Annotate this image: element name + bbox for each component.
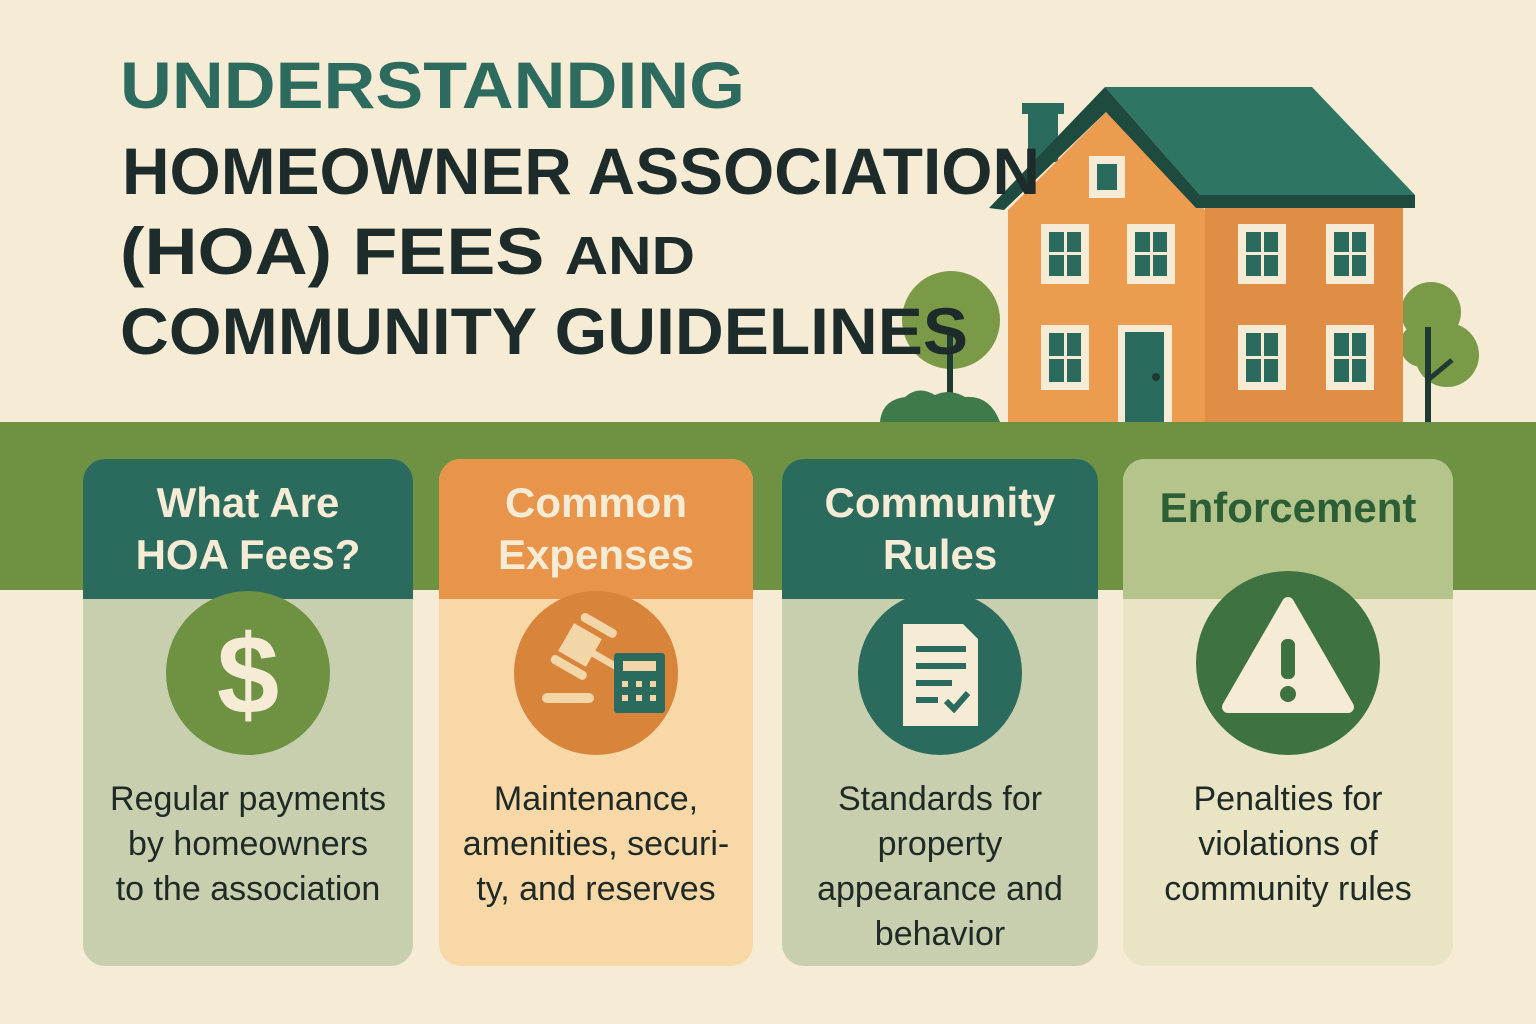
text: behavior xyxy=(875,915,1005,953)
header: Community xyxy=(824,479,1056,526)
card: Community Rules xyxy=(782,459,1098,966)
card: What Are HOA Fees xyxy=(83,459,413,966)
title xyxy=(120,48,1040,368)
header xyxy=(83,459,413,599)
text xyxy=(463,780,729,908)
text: to the association xyxy=(116,870,380,908)
house xyxy=(989,87,1415,422)
text: ty, and reserves xyxy=(476,870,716,908)
header: Common xyxy=(505,479,687,526)
green band xyxy=(0,422,1536,590)
icon: dollar xyxy=(166,591,330,755)
text: appearance and xyxy=(817,870,1063,908)
header xyxy=(1123,459,1453,599)
icon: gavel and calculator xyxy=(514,591,678,755)
tree left xyxy=(880,271,1000,422)
icon: dollar: $ xyxy=(217,612,279,737)
header: HOA Fees? xyxy=(136,531,360,578)
text: Standards for xyxy=(838,780,1042,818)
text xyxy=(110,780,386,908)
header: Rules xyxy=(883,531,997,578)
illustration: house and trees xyxy=(880,87,1479,422)
text: amenities, securi- xyxy=(463,825,729,863)
tree right xyxy=(1400,282,1479,422)
icon: warning xyxy=(1196,571,1380,755)
text: community rules xyxy=(1164,870,1412,908)
header: Enforcement xyxy=(1160,484,1416,531)
text xyxy=(817,780,1063,953)
icon: document xyxy=(858,599,1022,755)
title: (HOA) FEES AND xyxy=(120,214,695,288)
header: Expenses xyxy=(498,531,694,578)
header: What Are xyxy=(157,479,339,526)
title: HOMEOWNER ASSOCIATION xyxy=(122,134,1040,208)
card: Common Expenses xyxy=(439,459,753,966)
text: by homeowners xyxy=(128,825,368,863)
card: Enforcement xyxy=(1123,459,1453,966)
header xyxy=(439,459,753,599)
text: property xyxy=(878,825,1002,863)
text: Penalties for xyxy=(1194,780,1382,818)
text xyxy=(1164,780,1412,908)
text: violations of xyxy=(1198,825,1378,863)
text: Maintenance, xyxy=(494,780,698,818)
header xyxy=(782,459,1098,599)
text: Regular payments xyxy=(110,780,386,818)
title: UNDERSTANDING xyxy=(120,48,745,122)
title: COMMUNITY GUIDELINES xyxy=(120,294,968,368)
